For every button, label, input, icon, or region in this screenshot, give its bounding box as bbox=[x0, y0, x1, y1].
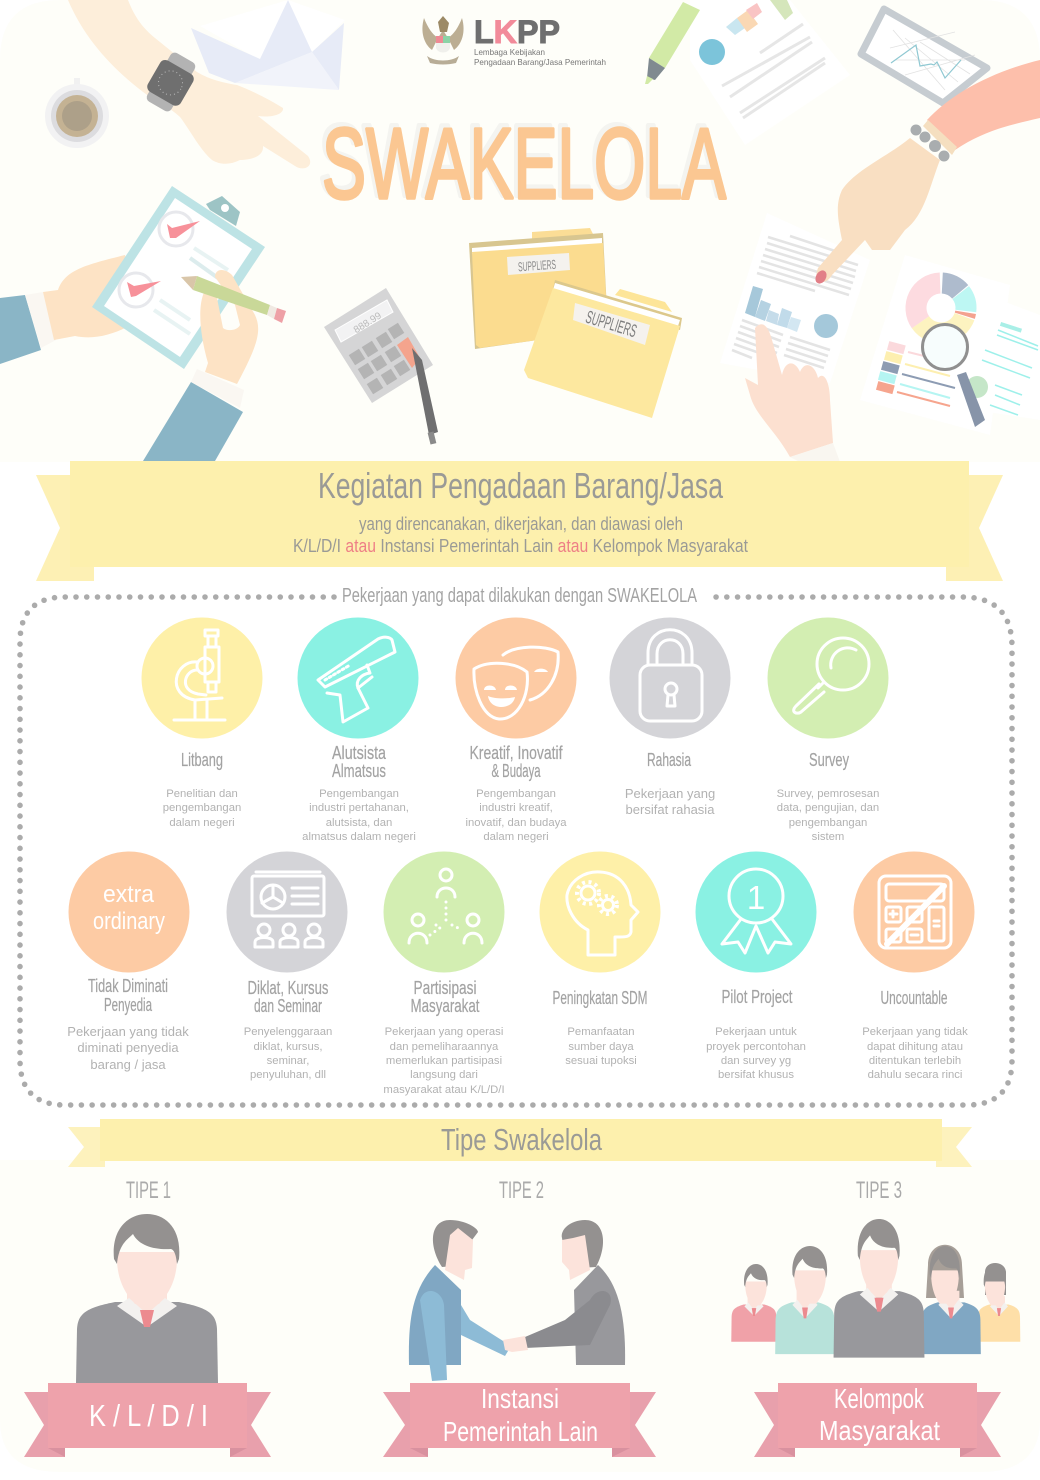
title bbox=[332, 743, 387, 781]
description: pengembangan bbox=[163, 802, 241, 814]
illustration: front folder bbox=[524, 280, 682, 418]
icon: ribbon award: 1 bbox=[747, 879, 765, 916]
illustration: report with bars bbox=[720, 213, 870, 383]
description bbox=[625, 786, 715, 817]
title: SWAKELOLA bbox=[319, 105, 723, 217]
title: Litbang bbox=[181, 750, 223, 770]
heading: Kegiatan Pengadaan Barang/Jasa bbox=[318, 465, 724, 506]
title bbox=[470, 743, 563, 781]
item: Survey bbox=[768, 618, 888, 843]
description: proyek percontohan bbox=[706, 1041, 806, 1053]
description bbox=[862, 1026, 968, 1081]
description: memerlukan partisipasi bbox=[386, 1055, 502, 1067]
figure: handshake bbox=[409, 1220, 625, 1381]
tipe label: TIPE 1 bbox=[126, 1177, 171, 1204]
person: yellow bbox=[978, 1263, 1020, 1342]
description: Pekerjaan untuk bbox=[715, 1026, 797, 1038]
title: Diklat, Kursus bbox=[248, 978, 328, 998]
illustration: calculator and pen bbox=[324, 288, 438, 445]
ribbon: K / L / D / I bbox=[89, 1398, 208, 1433]
icon: theatre masks bbox=[456, 618, 576, 738]
figure: community group bbox=[731, 1219, 1020, 1358]
illustration: arm with bracelet bbox=[910, 60, 1040, 162]
title bbox=[410, 978, 480, 1016]
logo wordmark: LKPP bbox=[474, 14, 560, 50]
title bbox=[88, 976, 168, 1015]
illustration: left hand and sleeve bbox=[0, 255, 140, 364]
item: Uncountable bbox=[854, 852, 974, 1081]
banner tails bbox=[36, 475, 1003, 581]
icon: training board bbox=[226, 852, 348, 972]
icon: crossed calculator bbox=[854, 852, 974, 972]
description: dalam negeri bbox=[483, 831, 549, 843]
title: Kreatif, Inovatif bbox=[470, 743, 563, 763]
tipe label: TIPE 2 bbox=[499, 1177, 544, 1204]
title bbox=[248, 978, 328, 1016]
description: dan survey yg bbox=[721, 1055, 791, 1067]
title: Almatsus bbox=[332, 761, 386, 781]
description bbox=[163, 788, 241, 829]
title: Alutsista bbox=[332, 743, 387, 763]
person: teal bbox=[775, 1246, 835, 1354]
title: & Budaya bbox=[492, 761, 541, 781]
illustration: pointing hand with watch bbox=[68, 0, 310, 168]
illustration: back folder: SUPPLIERS bbox=[518, 257, 557, 274]
description: seminar, bbox=[267, 1055, 309, 1067]
item: Litbang bbox=[142, 618, 262, 829]
description: Survey, pemrosesan bbox=[777, 788, 879, 800]
description bbox=[67, 1024, 189, 1072]
description: Pekerjaan yang tidak bbox=[862, 1026, 968, 1038]
description: diklat, kursus, bbox=[253, 1041, 323, 1053]
icon: extra ordinary: ordinary bbox=[93, 908, 165, 935]
background: hero panel bbox=[0, 0, 1040, 462]
ribbon: Kelompok bbox=[834, 1383, 925, 1414]
description: Penelitian dan bbox=[166, 788, 238, 800]
description: sesuai tupoksi bbox=[565, 1055, 637, 1067]
icon: head with gears bbox=[540, 852, 660, 972]
description: sumber daya bbox=[568, 1041, 634, 1053]
title: Penyedia bbox=[104, 995, 153, 1015]
description: Pekerjaan yang operasi bbox=[385, 1026, 503, 1038]
illustration: analytics page with donut and magnifier bbox=[860, 255, 1040, 435]
ribbon: Instansi bbox=[481, 1383, 559, 1414]
title: Rahasia bbox=[647, 750, 692, 770]
description: ditentukan terlebih bbox=[869, 1055, 961, 1067]
description: Penyelenggaraan bbox=[244, 1026, 332, 1038]
tipe 2 bbox=[383, 1177, 656, 1457]
icon: participation bbox=[384, 852, 504, 972]
person: pink bbox=[731, 1264, 777, 1342]
title: Survey bbox=[809, 750, 849, 770]
logo tagline: Lembaga Kebijakan bbox=[474, 47, 545, 57]
ribbon: Masyarakat bbox=[819, 1415, 940, 1446]
logo tagline bbox=[474, 47, 606, 67]
description bbox=[465, 788, 567, 843]
illustration: coffee cup bbox=[45, 78, 109, 148]
illustration: back folder bbox=[469, 228, 608, 349]
dotted frame bbox=[20, 597, 1012, 1105]
icon: magnifier bbox=[768, 618, 888, 738]
description bbox=[244, 1026, 332, 1081]
subheading bbox=[293, 513, 748, 556]
item: Peningkatan SDM bbox=[540, 852, 660, 1067]
banner heading: Tipe Swakelola bbox=[441, 1122, 603, 1157]
title: Partisipasi bbox=[414, 978, 476, 998]
description: bersifat rahasia bbox=[626, 802, 715, 817]
figure: single official bbox=[76, 1214, 218, 1383]
description: Pengembangan bbox=[319, 788, 399, 800]
logo tagline: Pengadaan Barang/Jasa Pemerintah bbox=[474, 57, 606, 67]
ribbon bbox=[24, 1383, 271, 1457]
description: almatsus dalam negeri bbox=[302, 831, 416, 843]
title bbox=[319, 105, 726, 220]
description: dapat dihitung atau bbox=[867, 1041, 963, 1053]
title: SWAKELOLA bbox=[322, 108, 726, 220]
description: dan pemeliharaannya bbox=[390, 1041, 499, 1053]
illustration: logo bbox=[422, 14, 606, 67]
icon: extra ordinary bbox=[68, 852, 190, 972]
banner: tipe swakelola bbox=[68, 1119, 972, 1167]
icon: ribbon award bbox=[696, 852, 816, 972]
title: Pilot Project bbox=[722, 987, 792, 1007]
description: Pengembangan bbox=[476, 788, 556, 800]
title: Peningkatan SDM bbox=[552, 988, 648, 1008]
icon: pistol bbox=[298, 618, 418, 738]
icon: extra ordinary: extra bbox=[103, 881, 155, 908]
description bbox=[777, 788, 879, 843]
description: sistem bbox=[812, 831, 844, 843]
background: bottom panel bbox=[0, 1160, 1040, 1472]
description: dahulu secara rinci bbox=[868, 1069, 962, 1081]
illustration: front folder: SUPPLIERS bbox=[584, 307, 639, 341]
title: Tidak Diminati bbox=[88, 976, 168, 996]
item: Kreatif bbox=[456, 618, 576, 843]
description bbox=[565, 1026, 637, 1067]
tipe 3 bbox=[731, 1177, 1020, 1457]
item: Pilot Project bbox=[696, 852, 816, 1081]
item: Diklat bbox=[226, 852, 348, 1081]
description: penyuluhan, dll bbox=[250, 1069, 326, 1081]
item: Rahasia bbox=[610, 618, 730, 817]
description: barang / jasa bbox=[90, 1057, 166, 1072]
illustration: calculator and pen: 888.99 bbox=[352, 310, 384, 336]
person: center bbox=[834, 1219, 924, 1358]
tipe 1 bbox=[24, 1177, 271, 1457]
subheading: K/L/D/I atau Instansi Pemerintah Lain atau Kelompok Masyarakat bbox=[293, 535, 748, 556]
illustration: red fingertip bbox=[813, 268, 829, 286]
description: alutsista, dan bbox=[326, 817, 392, 829]
description: langsung dari bbox=[410, 1069, 478, 1081]
icon: padlock bbox=[610, 618, 730, 738]
illustration: pointing hand bottom bbox=[745, 324, 840, 462]
illustration: pointing hand right bbox=[816, 138, 940, 282]
subheading: yang direncanakan, dikerjakan, dan diawasi oleh bbox=[359, 513, 683, 534]
frame heading: Pekerjaan yang dapat dilakukan dengan SWAKELOLA bbox=[342, 585, 697, 607]
description bbox=[706, 1026, 806, 1081]
illustration: tablet with line chart bbox=[861, 9, 987, 103]
description: pengembangan bbox=[789, 817, 867, 829]
description: industri pertahanan, bbox=[309, 802, 409, 814]
description: industri kreatif, bbox=[479, 802, 553, 814]
description: data, pengujian, dan bbox=[777, 802, 879, 814]
banner: kegiatan pengadaan bbox=[36, 461, 1003, 581]
description bbox=[302, 788, 416, 843]
description: Pekerjaan yang bbox=[625, 786, 715, 801]
title: Masyarakat bbox=[410, 996, 480, 1016]
title: dan Seminar bbox=[254, 996, 322, 1016]
icon: national emblem bbox=[422, 16, 464, 64]
illustration: clipboard bbox=[92, 186, 265, 369]
illustration: right hand with pencil and sleeve bbox=[143, 270, 286, 461]
item: Alutsista bbox=[298, 618, 418, 843]
ribbon bbox=[383, 1383, 656, 1457]
description: bersifat khusus bbox=[718, 1069, 794, 1081]
item: Partisipasi bbox=[383, 852, 505, 1096]
description bbox=[383, 1026, 505, 1096]
tipe label: TIPE 3 bbox=[856, 1177, 902, 1204]
item: Tidak Diminati bbox=[67, 852, 190, 1072]
illustration: paper planes bbox=[191, 0, 345, 90]
description: inovatif, dan budaya bbox=[465, 817, 567, 829]
description: diminati penyedia bbox=[77, 1040, 179, 1055]
description: masyarakat atau K/L/D/I bbox=[383, 1084, 505, 1096]
ribbon bbox=[754, 1383, 1001, 1457]
icon: microscope bbox=[142, 618, 262, 738]
illustration: report page and highlighter bbox=[645, 0, 850, 145]
ribbon: Pemerintah Lain bbox=[443, 1416, 598, 1447]
description: Pemanfaatan bbox=[567, 1026, 635, 1038]
description: dalam negeri bbox=[169, 817, 235, 829]
person: blue bbox=[921, 1245, 981, 1354]
description: Pekerjaan yang tidak bbox=[67, 1024, 189, 1039]
title: Uncountable bbox=[880, 988, 948, 1008]
